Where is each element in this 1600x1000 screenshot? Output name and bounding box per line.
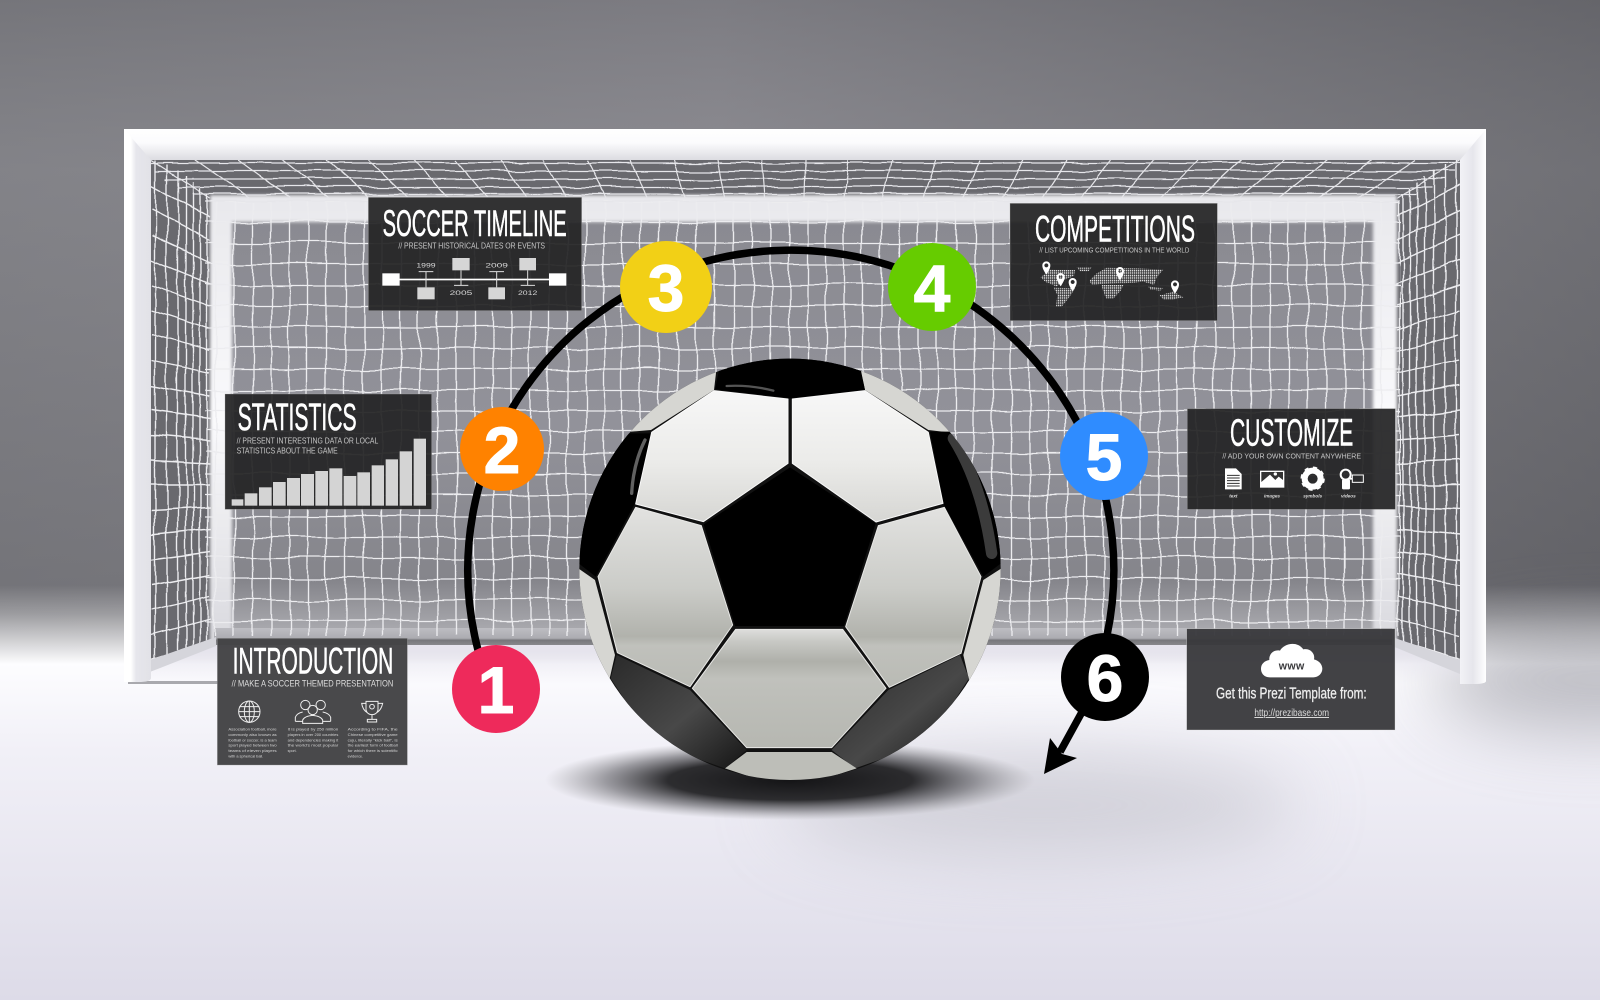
intro text column 1: sport played between two [228,743,278,748]
call to action text: Get this Prezi Template from: [1216,685,1367,702]
ball shadow [545,740,1300,855]
intro text column 1: commonly also known as [228,732,277,737]
step 2: 2 [484,413,520,487]
left post [124,129,151,682]
link text: http://prezibase.com [1254,708,1329,719]
subheading: customize: // ADD YOUR OWN CONTENT ANYWHERE [1222,451,1361,460]
map pins [1042,261,1179,294]
ball middle white panels [598,507,981,687]
bar chart [232,439,426,506]
icon: trophy [362,701,383,722]
icon: symbols gear [1302,468,1323,499]
icon: www cloud: www [1278,660,1305,672]
soccer ball [570,350,1010,790]
panel: soccer timeline [368,197,582,311]
ball bottom panels [692,629,886,748]
subheading: timeline: // PRESENT HISTORICAL DATES OR EVENTS [398,240,545,250]
gloss on black panels [632,386,992,553]
goal floor [151,645,1460,684]
timeline diagram: 2005 [450,291,473,297]
step 1: 1 [478,653,514,727]
goal back wall [228,218,1378,630]
subheading: introduction: // MAKE A SOCCER THEMED PRESENTATION [232,679,393,689]
icon: globe [239,701,260,722]
ball edge panels [573,353,1007,680]
panel: get template [1187,629,1395,730]
icon: images [1260,471,1284,499]
back ground bar [214,628,1392,645]
heading: customize: CUSTOMIZE [1230,413,1353,455]
step 5 [1060,412,1148,500]
intro text column 2: It is played by 250 million [288,727,338,732]
intro text column 3: evidence. [348,753,363,758]
ball black panels [570,350,1010,577]
intro text column 1: Association football, more [228,727,277,732]
icon: text document [1225,468,1242,499]
front ground line [128,681,218,684]
step 6: 6 [1087,641,1123,715]
timeline diagram [382,258,566,299]
top net [151,160,1460,201]
icon: images: images [1264,494,1280,499]
step 2 [460,407,544,491]
intro text column 1: football or soccer, is a team [228,737,277,742]
intro text column 1: with a spherical ball. [228,753,263,758]
intro text column 2 [288,727,339,753]
dotted world map [1041,267,1183,307]
intro text column 2: sport. [288,748,297,753]
goal interior: side and top net backing [151,160,1460,670]
arrow from step 6 [1044,712,1082,774]
panel: customize [1187,409,1395,509]
crossbar [124,129,1486,160]
ball dark lower panels [611,655,969,768]
heading: statistics: STATISTICS [238,397,357,439]
timeline diagram: 2009 [485,263,509,269]
panel: statistics [225,394,432,509]
right side net [1397,160,1460,662]
heading: introduction: INTRODUCTION [233,639,393,681]
panel: competitions [1010,203,1217,321]
intro text column 1: teams of eleven players [228,748,277,753]
soccer goal [124,129,1486,684]
timeline diagram: 1999 [416,263,437,269]
timeline diagram: 2012 [518,291,538,297]
subheading: statistics [237,435,378,455]
step 3: 3 [648,251,684,325]
ball top white panels [636,391,943,522]
subheading: statistics: // PRESENT INTERESTING DATA OR LOCAL [237,435,378,445]
back net [205,200,1401,636]
step 1 [452,645,540,733]
icon: videos camera: videos [1341,494,1356,499]
intro text column 3 [348,727,399,758]
intro text column 3: cuju, literally "kick ball", is [348,737,398,742]
intro text column 2: and dependencies making it [288,737,339,742]
intro text column 3: for which there is scientific [348,748,398,753]
right ground bar [1392,637,1460,674]
intro text column 3: Chinese competitive game [348,732,398,737]
step 4: 4 [914,251,951,325]
step 4 [888,243,976,331]
intro text column 3: the earliest form of football [348,743,398,748]
step 5: 5 [1086,420,1122,494]
heading: competitions: COMPETITIONS [1035,208,1195,250]
left ground bar [150,637,216,672]
subheading: statistics: STATISTICS ABOUT THE GAME [237,445,338,455]
intro text column 3: According to FIFA, the [348,727,399,732]
subheading: competitions: // LIST UPCOMING COMPETITIONS IN THE WORLD [1039,246,1189,255]
heading: soccer timeline: SOCCER TIMELINE [383,203,567,244]
icon: people [295,700,331,723]
center pentagon [704,467,876,626]
intro text column 2: the world's most popular [288,743,339,748]
intro text column 1 [228,727,278,758]
icon: symbols gear: symbols [1303,494,1323,499]
left side net [151,160,210,662]
back frame [210,195,1397,645]
icon: videos camera [1341,470,1363,499]
icon: text document: text [1229,494,1238,499]
panel: introduction [217,638,407,765]
icon: www cloud [1261,644,1322,677]
right post [1460,129,1486,684]
intro text column 2: players in over 200 countries [288,732,338,737]
step 6 [1061,633,1149,721]
step 3 [620,241,712,333]
path arc through the numbers [468,250,1114,650]
